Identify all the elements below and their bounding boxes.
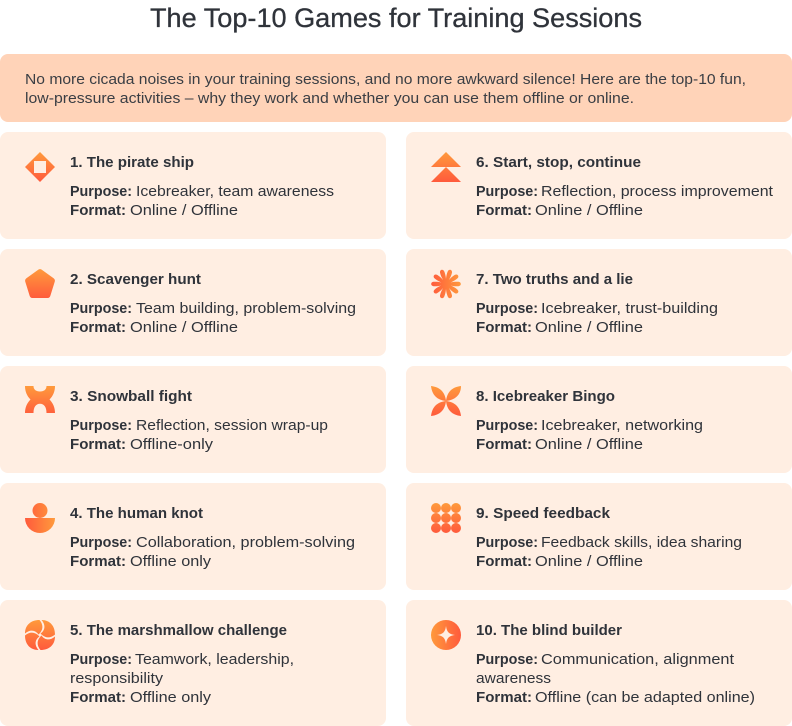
purpose: Purpose: xyxy=(70,183,132,200)
purpose xyxy=(476,300,718,317)
format xyxy=(70,436,214,453)
game title: 9. Speed feedback xyxy=(476,505,611,522)
purpose: Feedback skills, idea sharing xyxy=(541,534,742,551)
format: Online / Offline xyxy=(535,319,643,336)
purpose: Purpose: xyxy=(70,534,132,551)
panel: introduction: low-pressure activities – why they work and whether you can use them offline or online. xyxy=(25,90,634,107)
format: Format: xyxy=(70,319,126,336)
format: Online / Offline xyxy=(535,202,643,219)
format: Offline (can be adapted online) xyxy=(535,689,755,706)
panel: game 8 xyxy=(406,366,792,473)
format: Format: xyxy=(70,436,126,453)
panel: game 7 xyxy=(406,249,792,356)
icon: star in circle xyxy=(431,620,461,650)
icon: four petals xyxy=(431,386,461,416)
game title: 10. The blind builder xyxy=(476,622,622,639)
purpose xyxy=(476,651,735,687)
format xyxy=(476,436,643,453)
game title: 8. Icebreaker Bingo xyxy=(476,388,615,405)
panel: introduction xyxy=(0,54,792,122)
purpose: Reflection, process improvement xyxy=(541,183,774,200)
purpose: awareness xyxy=(476,670,551,687)
panel: game 9 xyxy=(406,483,792,590)
panel: game 2 xyxy=(0,249,386,356)
game title: 5. The marshmallow challenge xyxy=(70,622,287,639)
format: Offline only xyxy=(130,689,212,706)
purpose: Purpose: xyxy=(70,300,132,317)
format: Format: xyxy=(476,689,532,706)
format: Offline-only xyxy=(130,436,214,453)
purpose: Icebreaker, networking xyxy=(541,417,703,434)
purpose: Icebreaker, trust-building xyxy=(541,300,718,317)
icon: pentagon xyxy=(25,269,55,298)
panel: introduction: No more cicada noises in your training sessions, and no more awkward silence! Here are the top-10 fun, xyxy=(25,71,746,88)
format xyxy=(476,202,643,219)
format: Format: xyxy=(476,319,532,336)
panel: game 1 xyxy=(0,132,386,239)
icon: dot grid xyxy=(431,503,461,533)
panel: game 6 xyxy=(406,132,792,239)
purpose: Purpose: xyxy=(70,651,132,668)
format: Format: xyxy=(476,553,532,570)
format: Online / Offline xyxy=(130,202,238,219)
game title: 2. Scavenger hunt xyxy=(70,271,201,288)
game title: 1. The pirate ship xyxy=(70,154,194,171)
title: The Top-10 Games for Training Sessions xyxy=(150,3,642,33)
format: Format: xyxy=(476,202,532,219)
format: Format: xyxy=(476,436,532,453)
format: Format: xyxy=(70,553,126,570)
format xyxy=(476,553,643,570)
purpose: Purpose: xyxy=(476,300,538,317)
icon: person xyxy=(25,503,55,533)
game title: 7. Two truths and a lie xyxy=(476,271,633,288)
panel: game 4 xyxy=(0,483,386,590)
purpose: Purpose: xyxy=(476,417,538,434)
game title: 4. The human knot xyxy=(70,505,203,522)
purpose: Purpose: xyxy=(70,417,132,434)
purpose: Communication, alignment xyxy=(541,651,735,668)
format: Offline only xyxy=(130,553,212,570)
purpose: Team building, problem-solving xyxy=(136,300,356,317)
purpose xyxy=(476,417,703,434)
format: Online / Offline xyxy=(535,553,643,570)
icon: swirl xyxy=(25,620,55,650)
format: Online / Offline xyxy=(535,436,643,453)
panel: game 3 xyxy=(0,366,386,473)
purpose: Purpose: xyxy=(476,651,538,668)
purpose: Purpose: xyxy=(476,534,538,551)
game title: 6. Start, stop, continue xyxy=(476,154,641,171)
icon: diamond xyxy=(25,152,55,182)
icon: daisy xyxy=(431,269,461,299)
format xyxy=(70,319,238,336)
purpose: Purpose: xyxy=(476,183,538,200)
format: Format: xyxy=(70,202,126,219)
format xyxy=(70,202,238,219)
purpose xyxy=(70,651,294,687)
panel: game 10 xyxy=(406,600,792,726)
icon: x shape xyxy=(25,386,55,413)
format xyxy=(476,319,643,336)
format: Online / Offline xyxy=(130,319,238,336)
purpose: responsibility xyxy=(70,670,164,687)
format xyxy=(70,553,212,570)
purpose: Icebreaker, team awareness xyxy=(136,183,334,200)
purpose: Collaboration, problem-solving xyxy=(136,534,355,551)
icon: stacked triangles xyxy=(431,152,461,182)
game title: 3. Snowball fight xyxy=(70,388,192,405)
panel: game 5 xyxy=(0,600,386,726)
purpose: Reflection, session wrap-up xyxy=(136,417,328,434)
format: Format: xyxy=(70,689,126,706)
format xyxy=(70,689,212,706)
purpose: Teamwork, leadership, xyxy=(135,651,294,668)
